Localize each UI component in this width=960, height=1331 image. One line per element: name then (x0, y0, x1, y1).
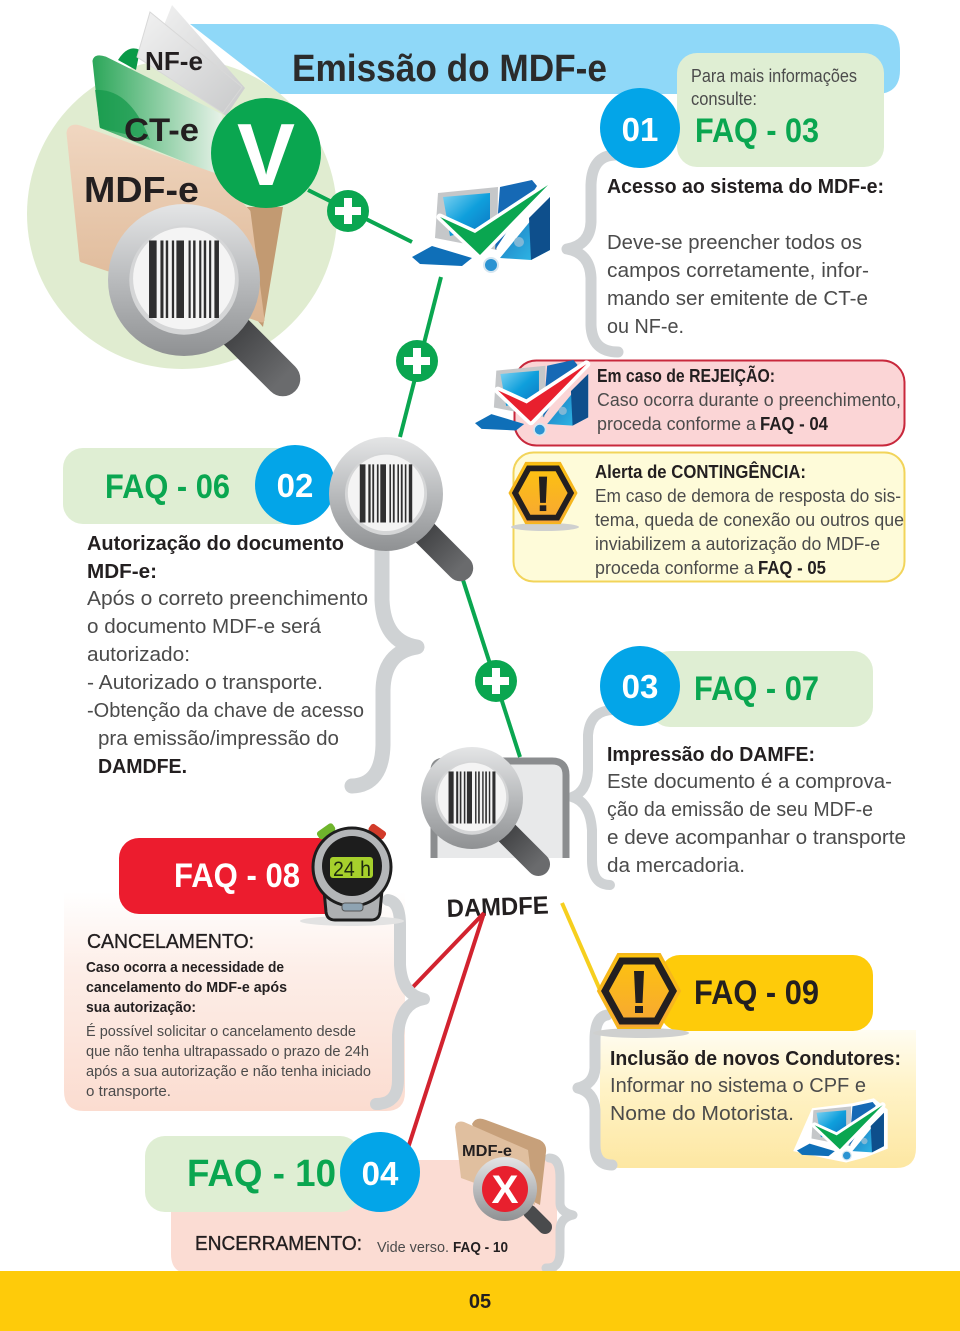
connector: red line to cancelamento (412, 913, 484, 988)
step 02 text: Autorização do documento (87, 533, 344, 555)
card background (171, 1160, 557, 1274)
step 03 panel: da mercadoria. (607, 855, 745, 877)
number 01 (600, 88, 680, 168)
icon: DAMDFE document with magnifier (421, 747, 566, 923)
footer bar with page number: 05 (469, 1291, 491, 1313)
panel: encerramento: FAQ - 10 (187, 1153, 336, 1195)
icon: document folders with V badge: CT-e (124, 112, 199, 148)
step 03 panel: ção da emissão de seu MDF-e (607, 799, 873, 821)
step 01 panel: mando ser emitente de CT-e (607, 288, 868, 310)
step 02 panel: autorizado: (87, 644, 190, 666)
icon: computer with green check (412, 180, 550, 272)
step 02 panel: 02 (277, 467, 313, 504)
FAQ 06 card (63, 448, 303, 524)
panel: encerramento: 04 (362, 1155, 399, 1192)
panel: cancelamento: sua autorização: (86, 999, 196, 1016)
step 02 panel (63, 445, 417, 786)
FAQ 03 card (677, 53, 884, 167)
step 01 panel (567, 53, 884, 352)
step 01 panel: 01 (622, 111, 658, 148)
step 03 text: Impressão do DAMFE: (607, 744, 815, 766)
text: CANCELAMENTO: (87, 931, 254, 953)
connector: green line with plus 1 (308, 190, 412, 242)
step 01 panel: campos corretamente, infor- (607, 260, 869, 282)
step 01 panel: Para mais informações (691, 66, 857, 86)
icon: document folders with V badge: MDF-e (84, 169, 199, 210)
panel: FAQ 09 condutores (578, 954, 916, 1168)
step 03 brace (572, 710, 614, 885)
icon: document folders with V badge: NF-e (145, 46, 203, 76)
step 03 panel: 03 (622, 668, 658, 705)
icon: warning hexagon (509, 463, 579, 531)
callout: contingência: inviabilizem a autorização do MDF-e (595, 534, 880, 554)
callout: contingência: Em caso de demora de resposta do sis- (595, 486, 901, 506)
panel: cancelamento (64, 822, 424, 1111)
text: Inclusão de novos Condutores: (610, 1048, 901, 1070)
step 03 panel: e deve acompanhar o transporte (607, 827, 906, 849)
panel: cancelamento: o transporte. (86, 1083, 171, 1100)
panel: cancelamento: após a sua autorização e não tenha iniciado (86, 1063, 371, 1080)
connector: red line to encerramento (408, 913, 484, 1148)
icon: document folders with V badge: V (237, 105, 295, 204)
panel: encerramento (145, 1119, 573, 1274)
icon: document folders with V badge (27, 5, 337, 379)
step 02 panel: pra emissão/impressão do (98, 728, 339, 750)
callout: contingência: tema, queda de conexão ou outros que (595, 510, 904, 530)
icon: folder with X magnifier: X (492, 1168, 519, 1212)
step 02 panel: Após o correto preenchimento (87, 588, 368, 610)
brace (376, 900, 424, 1104)
icon: computer with red check (475, 360, 588, 435)
connector: yellow line to FAQ 09 (562, 903, 600, 990)
icon: folder with X magnifier (455, 1119, 546, 1227)
step 01 text: Acesso ao sistema do MDF-e: (607, 176, 884, 198)
connector: green line with plus 2 (396, 277, 441, 437)
step 01 panel: Deve-se preencher todos os (607, 232, 862, 254)
callout: contingência: proceda conforme a (595, 558, 755, 578)
callout: rejeição: Em caso de REJEIÇÃO: (597, 365, 775, 386)
step 03 panel: Este documento é a comprova- (607, 771, 892, 793)
panel: cancelamento: É possível solicitar o cancelamento desde (86, 1023, 356, 1040)
callout: rejeição (475, 360, 904, 446)
icon: computer with green check (793, 1098, 888, 1162)
icon: magnifier barcode (329, 437, 460, 568)
step 01 panel: ou NF-e. (607, 316, 684, 338)
step 02 panel: - Autorizado o transporte. (87, 672, 323, 694)
panel: cancelamento: que não tenha ultrapassado o prazo de 24h (86, 1043, 369, 1060)
FAQ 08 card (119, 838, 349, 914)
FAQ 07 card (650, 651, 873, 727)
panel: encerramento: Vide verso. (377, 1239, 449, 1256)
footer bar with page number (0, 1271, 960, 1331)
callout: rejeição: Caso ocorra durante o preenchimento, (597, 390, 901, 410)
step 02 panel: MDF-e: (87, 561, 157, 583)
panel: cancelamento: cancelamento do MDF-e após (86, 979, 287, 996)
FAQ 10 card (145, 1136, 360, 1212)
panel: FAQ 09 condutores: FAQ - 09 (694, 974, 819, 1012)
step 02 panel: o documento MDF-e será (87, 616, 322, 638)
brace (352, 548, 417, 786)
title banner (190, 24, 900, 94)
icon: stopwatch 24h: 24 h (333, 858, 371, 881)
panel: FAQ 09 condutores: Nome do Motorista. (610, 1103, 794, 1125)
icon: stopwatch 24h (300, 822, 404, 926)
card background (600, 1030, 916, 1168)
panel: encerramento: FAQ - 10 (453, 1239, 508, 1256)
FAQ 09 card (660, 955, 873, 1031)
panel: FAQ 09 condutores: Informar no sistema o CPF e (610, 1075, 866, 1097)
number 03 (600, 646, 680, 726)
step 01 panel: FAQ - 03 (695, 112, 819, 150)
step 01 panel: consulte: (691, 89, 757, 109)
title: Emissão do MDF-e (292, 48, 607, 90)
step 03 panel (600, 646, 906, 877)
callout: contingência: FAQ - 05 (758, 558, 826, 578)
number 02 (255, 445, 335, 525)
icon: warning hexagon (593, 954, 689, 1038)
step 03 panel: FAQ - 07 (694, 670, 819, 708)
callout: contingência: Alerta de CONTINGÊNCIA: (595, 461, 806, 482)
label: DAMDFE (446, 891, 549, 923)
brace (546, 1158, 573, 1268)
brace (567, 155, 618, 352)
callout: rejeição: proceda conforme a (597, 414, 757, 434)
brace (578, 1015, 612, 1165)
card background (64, 892, 405, 1111)
icon: folder with X magnifier: MDF-e (462, 1143, 512, 1160)
step 02 panel: FAQ - 06 (105, 468, 230, 506)
panel: cancelamento: Caso ocorra a necessidade de (86, 959, 284, 976)
connector: green line with plus 3 (463, 580, 520, 757)
callout: contingência (509, 452, 904, 582)
number 04 (340, 1132, 420, 1212)
step 02 panel: -Obtenção da chave de acesso (87, 700, 364, 722)
step 02 panel: DAMDFE. (98, 756, 187, 778)
callout: rejeição: FAQ - 04 (760, 414, 828, 434)
panel: cancelamento: FAQ - 08 (174, 857, 300, 895)
text: ENCERRAMENTO: (195, 1233, 362, 1255)
